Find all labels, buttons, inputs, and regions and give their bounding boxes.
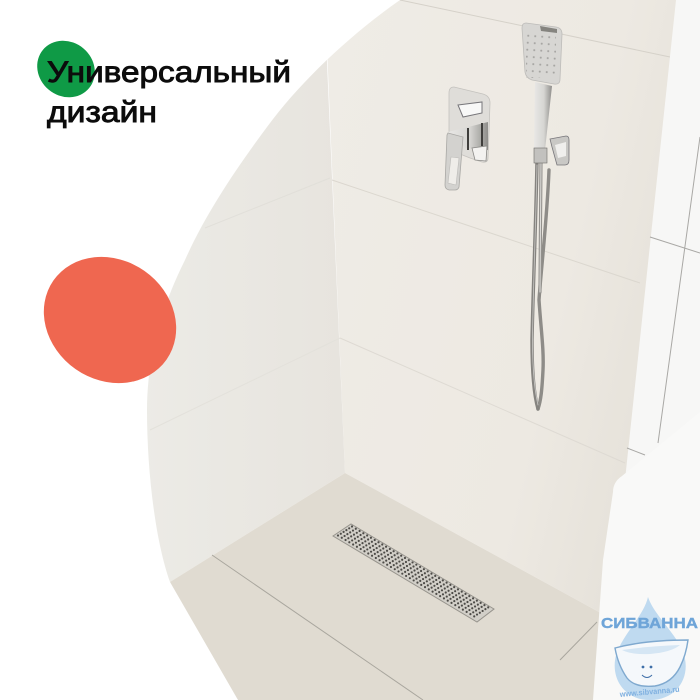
back wall bbox=[328, 0, 676, 612]
floor drain bbox=[333, 524, 494, 622]
title: Универсальный bbox=[47, 56, 291, 89]
icon: water drop bbox=[615, 597, 686, 700]
floor tile lines bbox=[212, 555, 597, 700]
left wall bbox=[147, 60, 345, 582]
logo: Сибванна bbox=[601, 597, 698, 700]
logo url: www.sibvanna.ru bbox=[618, 685, 680, 699]
shower mixer bbox=[445, 87, 490, 190]
shower hose bbox=[532, 160, 549, 409]
panel: shower photo bbox=[140, 0, 700, 700]
wall tile lines bbox=[150, 0, 670, 463]
blob: green accent bbox=[26, 29, 106, 109]
floor bbox=[170, 473, 610, 700]
white side wall bbox=[625, 0, 700, 480]
icon: bathtub bbox=[615, 640, 688, 686]
blob: red accent bbox=[19, 231, 201, 409]
wall bracket bbox=[550, 136, 569, 165]
title bbox=[47, 56, 291, 129]
white cabinet bbox=[593, 473, 700, 700]
hand shower bbox=[522, 23, 562, 163]
title: дизайн bbox=[47, 96, 157, 129]
logo name: СИБВАННА bbox=[601, 615, 698, 632]
